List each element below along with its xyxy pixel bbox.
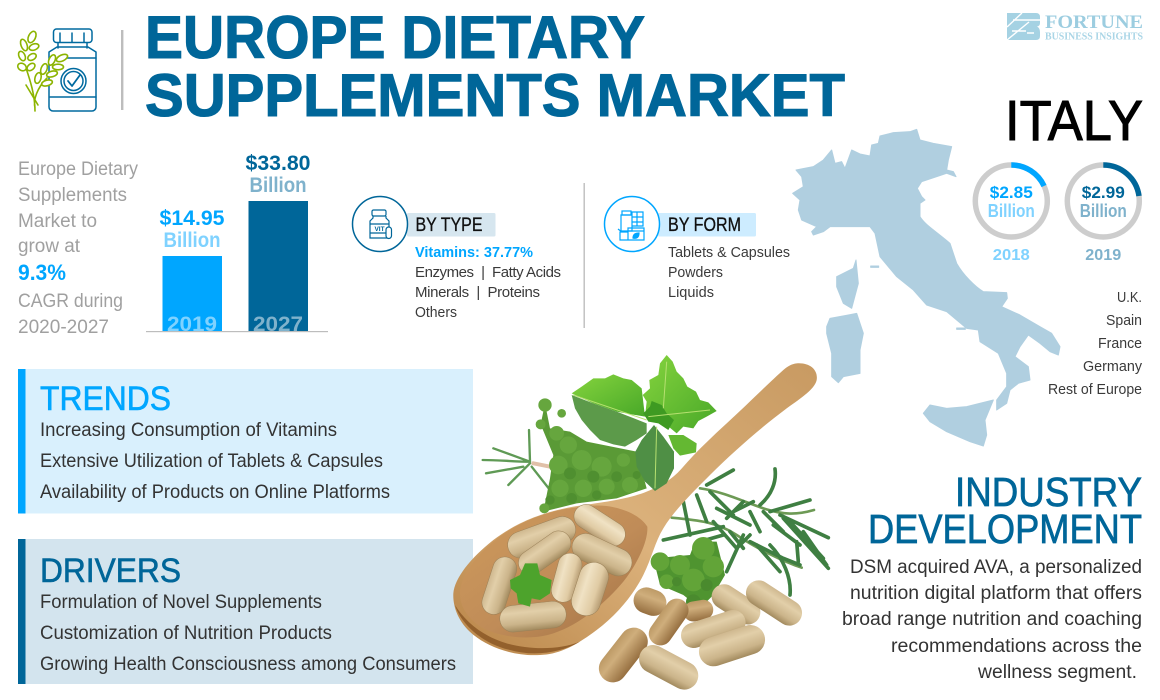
industry development text: broad range nutrition and coaching — [842, 609, 1142, 630]
industry development text: DSM acquired AVA, a personalized — [850, 557, 1142, 578]
panel: drivers: DRIVERS — [40, 552, 181, 590]
heading: Italy: ITALY — [1005, 89, 1143, 153]
spoon bowl — [460, 506, 647, 637]
panel: trends: Extensive Utilization of Tablets & Capsules — [40, 451, 383, 472]
small mint in spoon — [510, 563, 552, 607]
panel: drivers — [18, 539, 473, 684]
icon: supplement forms — [618, 211, 644, 240]
panel: by type: Vitamins: 37.77% — [415, 244, 533, 261]
growth text block — [18, 159, 138, 338]
donut: 2019 — [1067, 165, 1139, 264]
donut: 2018: Billion — [988, 201, 1035, 221]
country list: France — [1098, 335, 1142, 352]
panel: by type: Enzymes | Fatty Acids — [415, 264, 561, 281]
parsley lower — [651, 537, 725, 609]
country list: Germany — [1083, 358, 1142, 375]
panel: drivers: Customization of Nutrition Products — [40, 623, 332, 644]
donut: 2018: $2.85 — [990, 183, 1033, 202]
title: EUROPE DIETARY — [145, 4, 645, 71]
title: SUPPLEMENTS MARKET — [145, 62, 845, 129]
panel: by form: BY FORM — [668, 215, 741, 236]
growth text block: Market to — [18, 211, 97, 232]
panel: trends — [18, 369, 473, 514]
map: Italy — [793, 129, 1060, 446]
loose capsules — [593, 575, 807, 695]
bar chart: $14.95 — [160, 206, 225, 230]
industry development text: recommendations across the — [891, 636, 1142, 657]
donut: 2018: 2018 — [993, 247, 1030, 264]
logo: Fortune Business Insights: BUSINESS INSIGHTS — [1045, 32, 1143, 42]
donut: 2019: $2.99 — [1082, 183, 1125, 202]
growth text block: Supplements — [18, 185, 127, 206]
panel: drivers: Formulation of Novel Supplements — [40, 592, 322, 613]
icon: vitamin bottle — [370, 210, 392, 238]
illustration: wooden spoon with capsules and herbs — [453, 355, 828, 695]
donut: 2019: Billion — [1080, 201, 1127, 221]
heading: industry development — [868, 469, 1142, 552]
panel: trends: Increasing Consumption of Vitamins — [40, 420, 337, 441]
donut: 2019: 2019 — [1085, 247, 1121, 264]
panel: trends: Availability of Products on Online Platforms — [40, 482, 390, 503]
panel: by type: Others — [415, 304, 457, 321]
spoon underside shadow — [455, 605, 580, 653]
country list — [1048, 289, 1142, 398]
panel: by form: Powders — [668, 264, 723, 281]
icon: supplement bottle with wheat — [16, 29, 96, 111]
panel: trends: TRENDS — [40, 380, 171, 418]
capsules in spoon — [479, 500, 636, 633]
panel: by type: Minerals | Proteins — [415, 284, 540, 301]
parsley upper — [536, 398, 647, 513]
bar chart: Billion — [250, 174, 306, 197]
panel: by type: BY TYPE — [416, 215, 482, 236]
panel: by form: Liquids — [668, 284, 714, 301]
bar chart — [146, 151, 328, 336]
rosemary sprigs — [483, 430, 828, 595]
industry development text: nutrition digital platform that offers — [850, 583, 1142, 604]
growth text block: 2020-2027 — [18, 317, 109, 338]
growth text block: grow at — [18, 236, 81, 257]
bar chart: 2027 — [253, 313, 303, 336]
country list: Rest of Europe — [1048, 381, 1142, 398]
logo: Fortune Business Insights: FORTUNE — [1045, 12, 1143, 33]
panel: by form: Tablets & Capsules — [668, 244, 790, 261]
donut: 2018 — [975, 165, 1047, 264]
growth text block: 9.3% — [18, 260, 66, 285]
country list: Spain — [1106, 312, 1142, 329]
growth text block: Europe Dietary — [18, 159, 138, 180]
panel: by form — [604, 196, 790, 301]
section divider — [584, 183, 585, 328]
logo: Fortune Business Insights — [1007, 12, 1143, 42]
growth text block: CAGR during — [18, 291, 123, 312]
country list: U.K. — [1117, 289, 1142, 306]
bar chart: $33.80 — [246, 151, 311, 175]
icon: vitamin bottle: VIT — [374, 226, 385, 233]
heading: industry development: INDUSTRY — [955, 469, 1142, 515]
bar chart: 2019 — [167, 313, 217, 336]
title divider — [121, 30, 123, 110]
mint leaves — [572, 355, 717, 491]
industry development text — [842, 557, 1142, 683]
spoon — [453, 363, 817, 655]
title — [145, 4, 845, 129]
bar chart: Billion — [164, 229, 220, 252]
panel: drivers: Growing Health Consciousness among Consumers — [40, 654, 456, 675]
panel: by type — [352, 196, 561, 321]
industry development text: wellness segment. — [977, 662, 1137, 683]
